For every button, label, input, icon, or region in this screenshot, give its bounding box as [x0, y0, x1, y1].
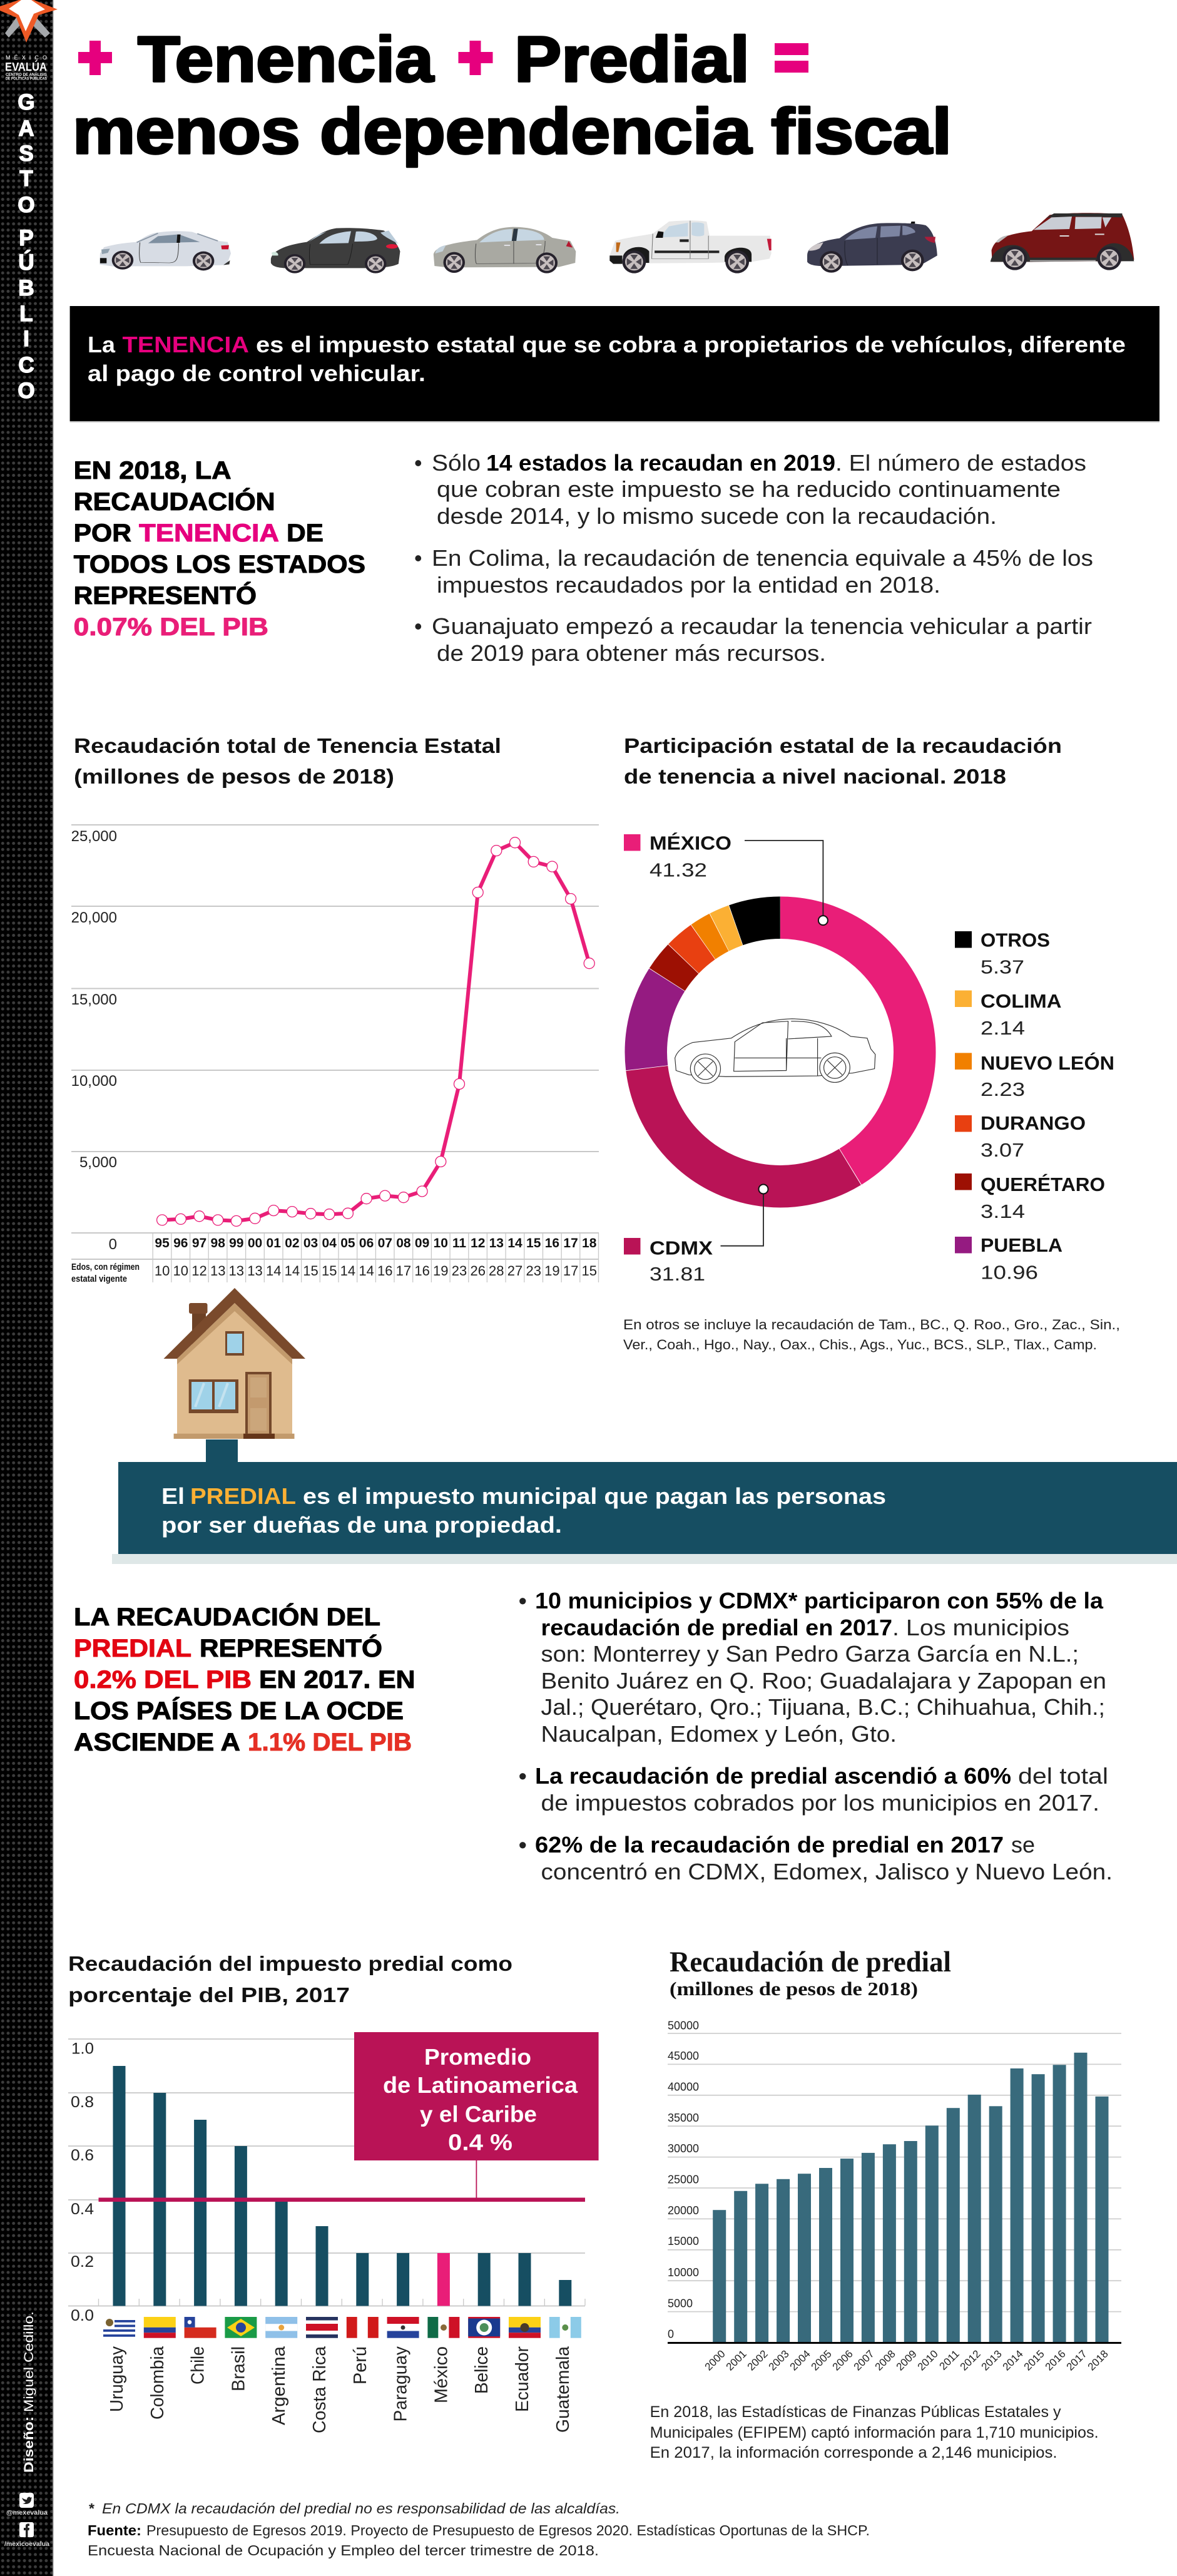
heading: predial share of GDP: REPRESENTÓ — [200, 1633, 382, 1662]
axis labels: 50000 — [668, 2019, 699, 2032]
sidebar title: gasto público: S — [19, 141, 34, 166]
states row: 13 — [210, 1263, 225, 1279]
states row: 16 — [377, 1263, 393, 1279]
year row: 95 — [155, 1236, 170, 1250]
states row: 15 — [322, 1263, 337, 1279]
year labels: 2017 — [1064, 2348, 1089, 2373]
text block: predial bullets: de impuestos cobrados por los municipios en 2017. — [541, 1790, 1099, 1816]
legend — [955, 929, 1114, 1283]
text block: predial bullets: Naucalpan, Edomex y León, Gto. — [541, 1721, 897, 1747]
icon: flag Brazil — [225, 2317, 257, 2338]
text block: predial bullets: son: Monterrey y San Pedro Garza García en N.L.; — [541, 1641, 1079, 1667]
year row: 07 — [378, 1236, 392, 1250]
country labels: Paraguay — [391, 2346, 411, 2422]
year row: 02 — [285, 1236, 300, 1250]
year row: 99 — [229, 1236, 243, 1250]
country labels: Perú — [350, 2346, 370, 2384]
year row: 96 — [173, 1236, 188, 1250]
heading: tenencia share of GDP — [74, 457, 365, 641]
text block: predial bullets: Benito Juárez en Q. Roo; Guadalajara y Zapopan en — [541, 1668, 1106, 1694]
states row: 23 — [452, 1263, 467, 1279]
country labels: Argentina — [269, 2346, 289, 2425]
data markers — [157, 837, 594, 1226]
text block: predial bullets: • — [519, 1588, 527, 1613]
year labels: 2010 — [915, 2348, 940, 2373]
text block: predial bullets: recaudación de predial en 2017 — [541, 1615, 892, 1640]
data line — [162, 842, 589, 1221]
note: EFIPEM: En 2018, las Estadísticas de Finanzas Públicas Estatales y — [650, 2403, 1061, 2421]
legend: OTROS — [981, 929, 1050, 951]
chart heading: tenencia total: Recaudación total de Tenencia Estatal — [74, 734, 501, 757]
icon: flag Uruguay — [103, 2317, 135, 2338]
icon: grey sedan — [434, 227, 576, 273]
footnote and sources — [88, 2500, 870, 2558]
footnote and sources: * — [89, 2500, 94, 2517]
year labels: 2016 — [1043, 2348, 1068, 2373]
year row: 17 — [563, 1236, 578, 1250]
country labels: México — [431, 2346, 451, 2403]
chart heading: tenencia total: (millones de pesos de 2018) — [74, 765, 394, 788]
logo text: EVALÚA — [5, 60, 47, 73]
states row: 14 — [285, 1263, 300, 1279]
axis labels — [668, 2019, 699, 2341]
callout: México — [624, 832, 828, 925]
legend: COLIMA — [981, 990, 1061, 1012]
y axis labels: 15,000 — [71, 991, 117, 1008]
logo text: MÉXICO — [6, 54, 47, 61]
country labels: Belice — [472, 2346, 492, 2394]
title word: Tenencia: Tenencia — [138, 23, 434, 95]
logo text: DE POLÍTICAS PÚBLICAS — [6, 75, 47, 81]
states row: 17 — [396, 1263, 411, 1279]
year row: 12 — [471, 1236, 485, 1250]
text block: tenencia bullets: . El número de estados — [835, 450, 1086, 476]
legend: PUEBLA — [981, 1234, 1062, 1256]
heading: tenencia share of GDP: POR — [74, 519, 131, 547]
year row: 18 — [582, 1236, 597, 1250]
heading: predial share of GDP: 0.2% DEL PIB — [74, 1666, 252, 1694]
banner: predial definition: por ser dueñas de una propiedad. — [161, 1512, 562, 1538]
icon: red crossover — [991, 213, 1134, 270]
car row — [99, 213, 1134, 273]
states row: 15 — [303, 1263, 318, 1279]
legend: 2.23 — [981, 1078, 1025, 1100]
year labels — [703, 2348, 1111, 2373]
text block: predial bullets: del total — [1018, 1763, 1108, 1789]
text block: predial bullets: 62% de la recaudación de predial en 2017 — [535, 1832, 1004, 1858]
states row: 13 — [247, 1263, 263, 1279]
icon: white coupe — [99, 231, 231, 270]
country labels: Ecuador — [512, 2346, 532, 2412]
country labels: Brasil — [228, 2346, 248, 2391]
year labels: 2007 — [852, 2348, 877, 2373]
note: EFIPEM: En 2017, la información corresponde a 2,146 municipios. — [650, 2444, 1057, 2461]
text block: tenencia bullets: impuestos recaudados por la entidad en 2018. — [437, 572, 940, 598]
bars — [713, 2053, 1109, 2343]
text block: predial bullets: • — [519, 1763, 527, 1789]
chart heading: predial as share of GDP: Recaudación del impuesto predial como — [68, 1952, 512, 1975]
axis labels: 0.2 — [71, 2253, 94, 2271]
year labels: 2001 — [724, 2348, 749, 2373]
footnote and sources: Fuente: — [88, 2522, 141, 2538]
y axis labels: 0 — [109, 1236, 117, 1253]
icon: flag Chile — [185, 2317, 217, 2338]
icon: flag Ecuador — [509, 2317, 541, 2338]
axis labels: 45000 — [668, 2050, 699, 2062]
axis labels: 30000 — [668, 2142, 699, 2155]
year row: 14 — [507, 1236, 522, 1250]
year row: 05 — [340, 1236, 355, 1250]
text block: predial bullets: • — [519, 1832, 527, 1858]
text block: predial bullets: 10 municipios y CDMX* participaron con 55% de la — [535, 1588, 1104, 1613]
heading: predial share of GDP: EN 2017. EN — [259, 1666, 415, 1694]
text block: tenencia bullets: • — [414, 613, 422, 639]
flags — [103, 2317, 581, 2338]
bar chart: predial as share of GDP — [68, 2032, 599, 2433]
chart heading: predial revenue: Recaudación de predial — [670, 1946, 951, 1978]
year row: 01 — [267, 1236, 281, 1250]
chart heading: state share — [624, 734, 1062, 788]
bars — [113, 2066, 571, 2306]
note: otros: Ver., Coah., Hgo., Nay., Oax., Chis., Ags., Yuc., BCS., SLP., Tlax., Camp. — [623, 1337, 1097, 1352]
year labels: 2005 — [809, 2348, 834, 2373]
axis labels: 5000 — [668, 2297, 693, 2309]
states row: 19 — [433, 1263, 449, 1279]
heading: tenencia share of GDP: EN 2018, LA — [74, 457, 232, 484]
footnote and sources: Presupuesto de Egresos 2019. Proyecto de Presupuesto de Egresos 2020. Estadísticas Oportunas de la SHCP. — [146, 2522, 870, 2538]
states row: 10 — [155, 1263, 170, 1279]
legend: 5.37 — [981, 956, 1024, 978]
country labels — [107, 2346, 573, 2433]
axis labels: 10000 — [668, 2266, 699, 2279]
icon: flag Colombia — [144, 2317, 176, 2338]
year row: 98 — [211, 1236, 225, 1250]
heading: tenencia share of GDP: REPRESENTÓ — [74, 581, 257, 610]
chart heading: state share: de tenencia a nivel nacional. 2018 — [624, 765, 1006, 788]
note: EFIPEM: Municipales (EFIPEM) captó información para 1,710 municipios. — [650, 2424, 1099, 2441]
year labels: 2008 — [873, 2348, 898, 2373]
sidebar title: gasto público: T — [19, 166, 33, 191]
callout: México: 41.32 — [650, 859, 707, 881]
axis labels: 0.6 — [71, 2147, 94, 2164]
states row: 12 — [191, 1263, 207, 1279]
sidebar title: gasto público: Ú — [18, 250, 34, 275]
legend: 3.14 — [981, 1200, 1025, 1222]
banner: tenencia definition: La — [88, 332, 116, 357]
sidebar — [0, 0, 58, 2576]
banner: tenencia definition: es el impuesto estatal que se cobra a propietarios de vehículos, diferente — [256, 332, 1126, 357]
states row: 28 — [489, 1263, 504, 1279]
heading: predial share of GDP: PREDIAL — [74, 1635, 191, 1662]
y axis labels: 20,000 — [71, 909, 117, 926]
axis labels: 0 — [668, 2328, 674, 2341]
legend: DURANGO — [981, 1112, 1086, 1134]
year row — [155, 1236, 597, 1250]
text block: predial bullets: La recaudación de predial ascendió a 60% — [535, 1763, 1011, 1789]
icon: flag Paraguay — [387, 2317, 419, 2338]
average line — [99, 2160, 585, 2202]
year labels: 2015 — [1022, 2348, 1047, 2373]
title line 2: menos dependencia fiscal — [73, 95, 952, 167]
text block: tenencia bullets: • — [414, 450, 422, 476]
banner: tenencia definition — [70, 306, 1159, 422]
legend: 3.07 — [981, 1139, 1024, 1161]
note: otros — [623, 1317, 1120, 1352]
states row — [155, 1263, 597, 1279]
year row: 09 — [415, 1236, 429, 1250]
banner: predial definition: PREDIAL — [190, 1483, 296, 1509]
text block: tenencia bullets: desde 2014, y lo mismo sucede con la recaudación. — [437, 503, 997, 529]
callout: CDMX: 31.81 — [650, 1263, 705, 1285]
banner: predial definition: es el impuesto municipal que pagan las personas — [303, 1483, 886, 1509]
banner: tenencia definition: al pago de control vehicular. — [88, 360, 425, 386]
country labels: Guatemala — [553, 2346, 573, 2433]
country labels: Chile — [188, 2346, 208, 2384]
year labels: 2000 — [703, 2348, 728, 2373]
country labels: Colombia — [148, 2346, 168, 2420]
callout: CDMX: CDMX — [650, 1237, 713, 1259]
heading: predial share of GDP: ASCIENDE A — [74, 1729, 240, 1756]
year row: 06 — [359, 1236, 374, 1250]
banner: predial definition: El — [161, 1483, 185, 1509]
icon: black hatchback — [271, 228, 400, 273]
states row: 10 — [173, 1263, 188, 1279]
bar chart: predial revenue — [668, 2019, 1121, 2373]
logo text — [5, 54, 47, 81]
states row: 14 — [359, 1263, 374, 1279]
chart heading: predial as share of GDP — [68, 1952, 512, 2006]
callout: regional average: Promedio — [424, 2044, 531, 2070]
text block: predial bullets — [519, 1588, 1113, 1884]
sidebar title: gasto público: C — [18, 353, 34, 377]
heading: predial share of GDP: LA RECAUDACIÓN DEL — [74, 1602, 380, 1631]
icon: flag Mexico — [427, 2317, 459, 2338]
states row: 26 — [470, 1263, 486, 1279]
chart heading: tenencia total — [74, 734, 501, 788]
heading: predial share of GDP: 1.1% DEL PIB — [248, 1729, 412, 1756]
states row: 14 — [340, 1263, 355, 1279]
year labels: 2002 — [745, 2348, 770, 2373]
sidebar title: gasto público: I — [23, 327, 29, 351]
year row: 11 — [452, 1236, 466, 1250]
year labels: 2014 — [1001, 2348, 1026, 2373]
donut chart: state share — [624, 832, 1114, 1285]
line chart: tenencia total — [71, 825, 599, 1284]
year row: 16 — [545, 1236, 559, 1250]
states row: 15 — [581, 1263, 597, 1279]
note: otros: En otros se incluye la recaudación de Tam., BC., Q. Roo., Gro., Zac., Sin., — [623, 1317, 1120, 1332]
heading: tenencia share of GDP: RECAUDACIÓN — [74, 487, 275, 516]
note: EFIPEM — [650, 2403, 1099, 2461]
icon: car outline — [675, 1019, 875, 1083]
year row: 10 — [434, 1236, 448, 1250]
states row: 27 — [507, 1263, 522, 1279]
footnote and sources: Encuesta Nacional de Ocupación y Empleo del tercer trimestre de 2018. — [88, 2542, 599, 2558]
year row: 08 — [396, 1236, 411, 1250]
text block: tenencia bullets: Guanajuato empezó a recaudar la tenencia vehicular a partir — [432, 613, 1092, 639]
heading: predial share of GDP — [74, 1602, 415, 1756]
states row: 13 — [229, 1263, 244, 1279]
axis labels: 20000 — [668, 2204, 699, 2217]
icon: dark SUV — [807, 222, 937, 273]
sidebar title: gasto público: B — [18, 276, 34, 300]
text block: predial bullets: se — [1011, 1832, 1035, 1858]
axis labels: 0.0 — [71, 2307, 94, 2324]
legend: 2.14 — [981, 1017, 1025, 1039]
twitter handle: @mexevalua — [6, 2509, 48, 2517]
chart heading: predial as share of GDP: porcentaje del PIB, 2017 — [68, 1983, 350, 2006]
year labels: 2018 — [1086, 2348, 1111, 2373]
y axis labels: 5,000 — [79, 1154, 117, 1171]
sidebar title: gasto público — [18, 90, 35, 403]
sidebar title: gasto público: O — [18, 193, 35, 217]
legend: 10.96 — [981, 1262, 1038, 1283]
states row label: Edos, con régimen — [71, 1262, 140, 1272]
y axis labels — [71, 828, 117, 1253]
axis labels — [71, 2040, 94, 2324]
axis labels: 15000 — [668, 2235, 699, 2247]
icon: flag Costa Rica — [306, 2317, 338, 2338]
icon: flag Belize — [468, 2317, 500, 2338]
heading: tenencia share of GDP: DE — [287, 519, 324, 547]
sidebar title: gasto público: P — [19, 226, 34, 250]
country labels: Uruguay — [107, 2346, 127, 2412]
icon: México Evalúa star logo — [0, 0, 58, 43]
year labels: 2011 — [937, 2348, 962, 2373]
text block: tenencia bullets: • — [414, 545, 422, 571]
axis labels: 25000 — [668, 2173, 699, 2185]
text block: tenencia bullets — [414, 450, 1093, 666]
icon: second plus — [458, 41, 493, 75]
icon: plus — [78, 41, 112, 75]
callout: México: MÉXICO — [650, 832, 731, 854]
text block: predial bullets: . Los municipios — [892, 1615, 1069, 1640]
states row: 17 — [563, 1263, 578, 1279]
callout: regional average: de Latinoamerica — [383, 2072, 578, 2098]
axis labels: 0.8 — [71, 2093, 94, 2111]
text block: predial bullets: concentró en CDMX, Edomex, Jalisco y Nuevo León. — [541, 1859, 1113, 1884]
y axis labels: 25,000 — [71, 828, 117, 845]
callout: CDMX — [624, 1184, 768, 1285]
icon: flag Argentina — [265, 2317, 297, 2338]
icon: white pickup — [609, 220, 772, 273]
banner: predial definition — [112, 1462, 1177, 1564]
states row: 19 — [544, 1263, 560, 1279]
year labels: 2012 — [958, 2348, 983, 2373]
icon: twitter — [19, 2493, 34, 2508]
y axis labels: 10,000 — [71, 1073, 117, 1090]
text block: tenencia bullets: de 2019 para obtener más recursos. — [437, 640, 826, 666]
states row label — [71, 1262, 140, 1284]
icon: flag Guatemala — [549, 2317, 581, 2338]
design credit: Diseño: Miguel Cedillo. — [22, 2311, 36, 2473]
states row label: estatal vigente — [71, 1274, 127, 1284]
callout: regional average: y el Caribe — [420, 2102, 537, 2127]
icon: equals — [775, 43, 808, 73]
year labels: 2009 — [894, 2348, 919, 2373]
logo text: CENTRO DE ANÁLISIS — [6, 71, 47, 77]
heading: predial share of GDP: LOS PAÍSES DE LA OCDE — [74, 1697, 404, 1725]
text block: tenencia bullets: Sólo — [432, 450, 481, 476]
year row: 00 — [248, 1236, 262, 1250]
callout: regional average: 0.4 % — [448, 2129, 512, 2155]
axis labels: 0.4 — [71, 2200, 94, 2218]
states row: 16 — [414, 1263, 430, 1279]
states row: 14 — [266, 1263, 281, 1279]
heading: tenencia share of GDP: TODOS LOS ESTADOS — [74, 551, 365, 578]
year row: 97 — [192, 1236, 206, 1250]
chart heading: predial revenue — [670, 1946, 951, 2000]
icon: house — [164, 1288, 305, 1463]
year row: 03 — [303, 1236, 318, 1250]
year labels: 2006 — [830, 2348, 855, 2373]
sidebar title: gasto público: L — [19, 302, 33, 326]
axis labels: 35000 — [668, 2112, 699, 2124]
chart heading: predial revenue: (millones de pesos de 2018) — [670, 1978, 918, 2000]
year labels: 2003 — [767, 2348, 792, 2373]
heading: tenencia share of GDP: 0.07% DEL PIB — [74, 613, 268, 641]
title word: Predial: Predial — [514, 23, 750, 95]
year labels: 2013 — [979, 2348, 1004, 2373]
sidebar title: gasto público: G — [18, 90, 35, 115]
banner: tenencia definition: TENENCIA — [123, 332, 249, 357]
year labels: 2004 — [788, 2348, 813, 2373]
axis labels: 1.0 — [71, 2040, 94, 2058]
country labels: Costa Rica — [310, 2346, 330, 2433]
sidebar title: gasto público: O — [18, 379, 35, 403]
title — [73, 23, 952, 167]
sidebar title: gasto público: A — [18, 116, 34, 141]
icon: facebook — [19, 2522, 34, 2537]
text block: tenencia bullets: que cobran este impuesto se ha reducido continuamente — [437, 476, 1061, 502]
text block: tenencia bullets: 14 estados la recaudan en 2019 — [486, 450, 835, 476]
text block: predial bullets: Jal.; Querétaro, Qro.; Tijuana, B.C.; Chihuahua, Chih.; — [541, 1694, 1105, 1720]
facebook handle: /mexicoevalua — [4, 2540, 49, 2548]
year row: 15 — [526, 1236, 541, 1250]
heading: tenencia share of GDP: TENENCIA — [139, 519, 279, 547]
callout: regional average — [354, 2032, 599, 2160]
text block: tenencia bullets: En Colima, la recaudación de tenencia equivale a 45% de los — [432, 545, 1093, 571]
legend: NUEVO LEÓN — [981, 1051, 1114, 1074]
year row: 04 — [322, 1236, 337, 1250]
footnote and sources: En CDMX la recaudación del predial no es responsabilidad de las alcaldías. — [102, 2500, 620, 2517]
legend: QUERÉTARO — [981, 1173, 1105, 1195]
icon: flag Peru — [347, 2317, 379, 2338]
year row: 13 — [489, 1236, 504, 1250]
states row: 23 — [526, 1263, 541, 1279]
chart heading: state share: Participación estatal de la recaudación — [624, 734, 1062, 757]
axis labels: 40000 — [668, 2080, 699, 2093]
